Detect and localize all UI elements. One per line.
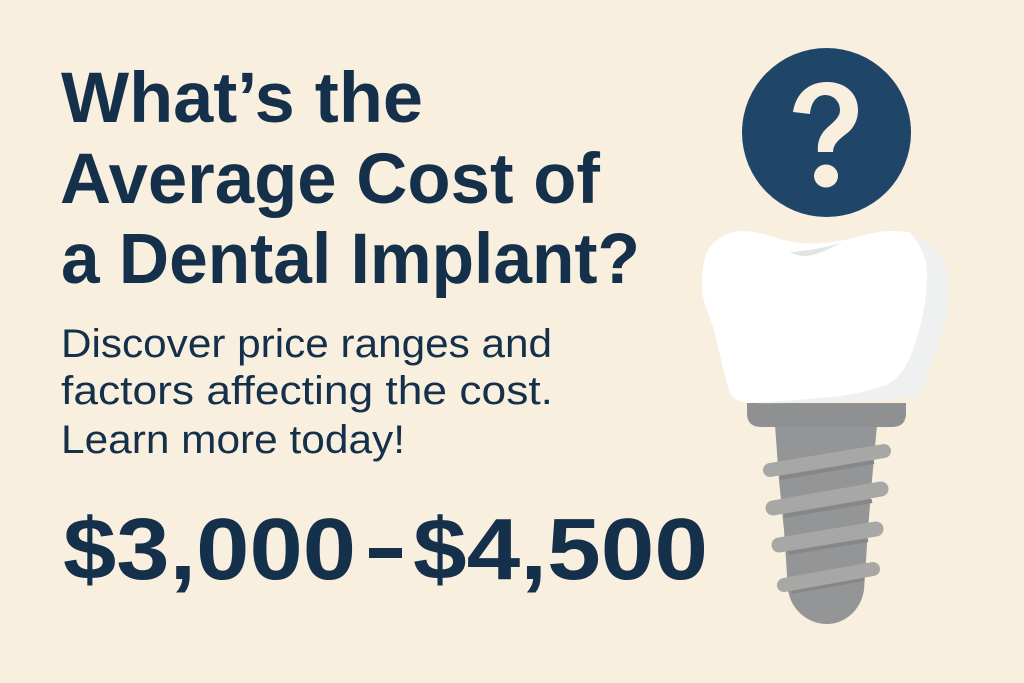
price range <box>63 501 708 598</box>
icon: question mark circle <box>742 48 911 217</box>
price range: $4,500 <box>413 501 708 598</box>
implant screw body <box>775 425 877 624</box>
implant abutment <box>747 403 906 427</box>
title: a Dental Implant? <box>61 220 640 299</box>
icon: dental implant <box>702 231 950 624</box>
title: What’s the <box>61 59 423 138</box>
subtitle text block: factors affecting the cost. <box>61 369 553 413</box>
subtitle text block: Learn more today! <box>61 418 405 462</box>
subtitle text block <box>61 322 553 462</box>
title: Average Cost of <box>60 140 600 219</box>
tooth crown <box>702 231 950 403</box>
tooth crease <box>790 243 840 256</box>
subtitle text block: Discover price ranges and <box>61 322 552 366</box>
title <box>60 59 640 299</box>
price range: $3,000 <box>63 501 356 598</box>
implant screw thread shadows <box>780 462 874 592</box>
implant screw threads <box>770 451 884 585</box>
